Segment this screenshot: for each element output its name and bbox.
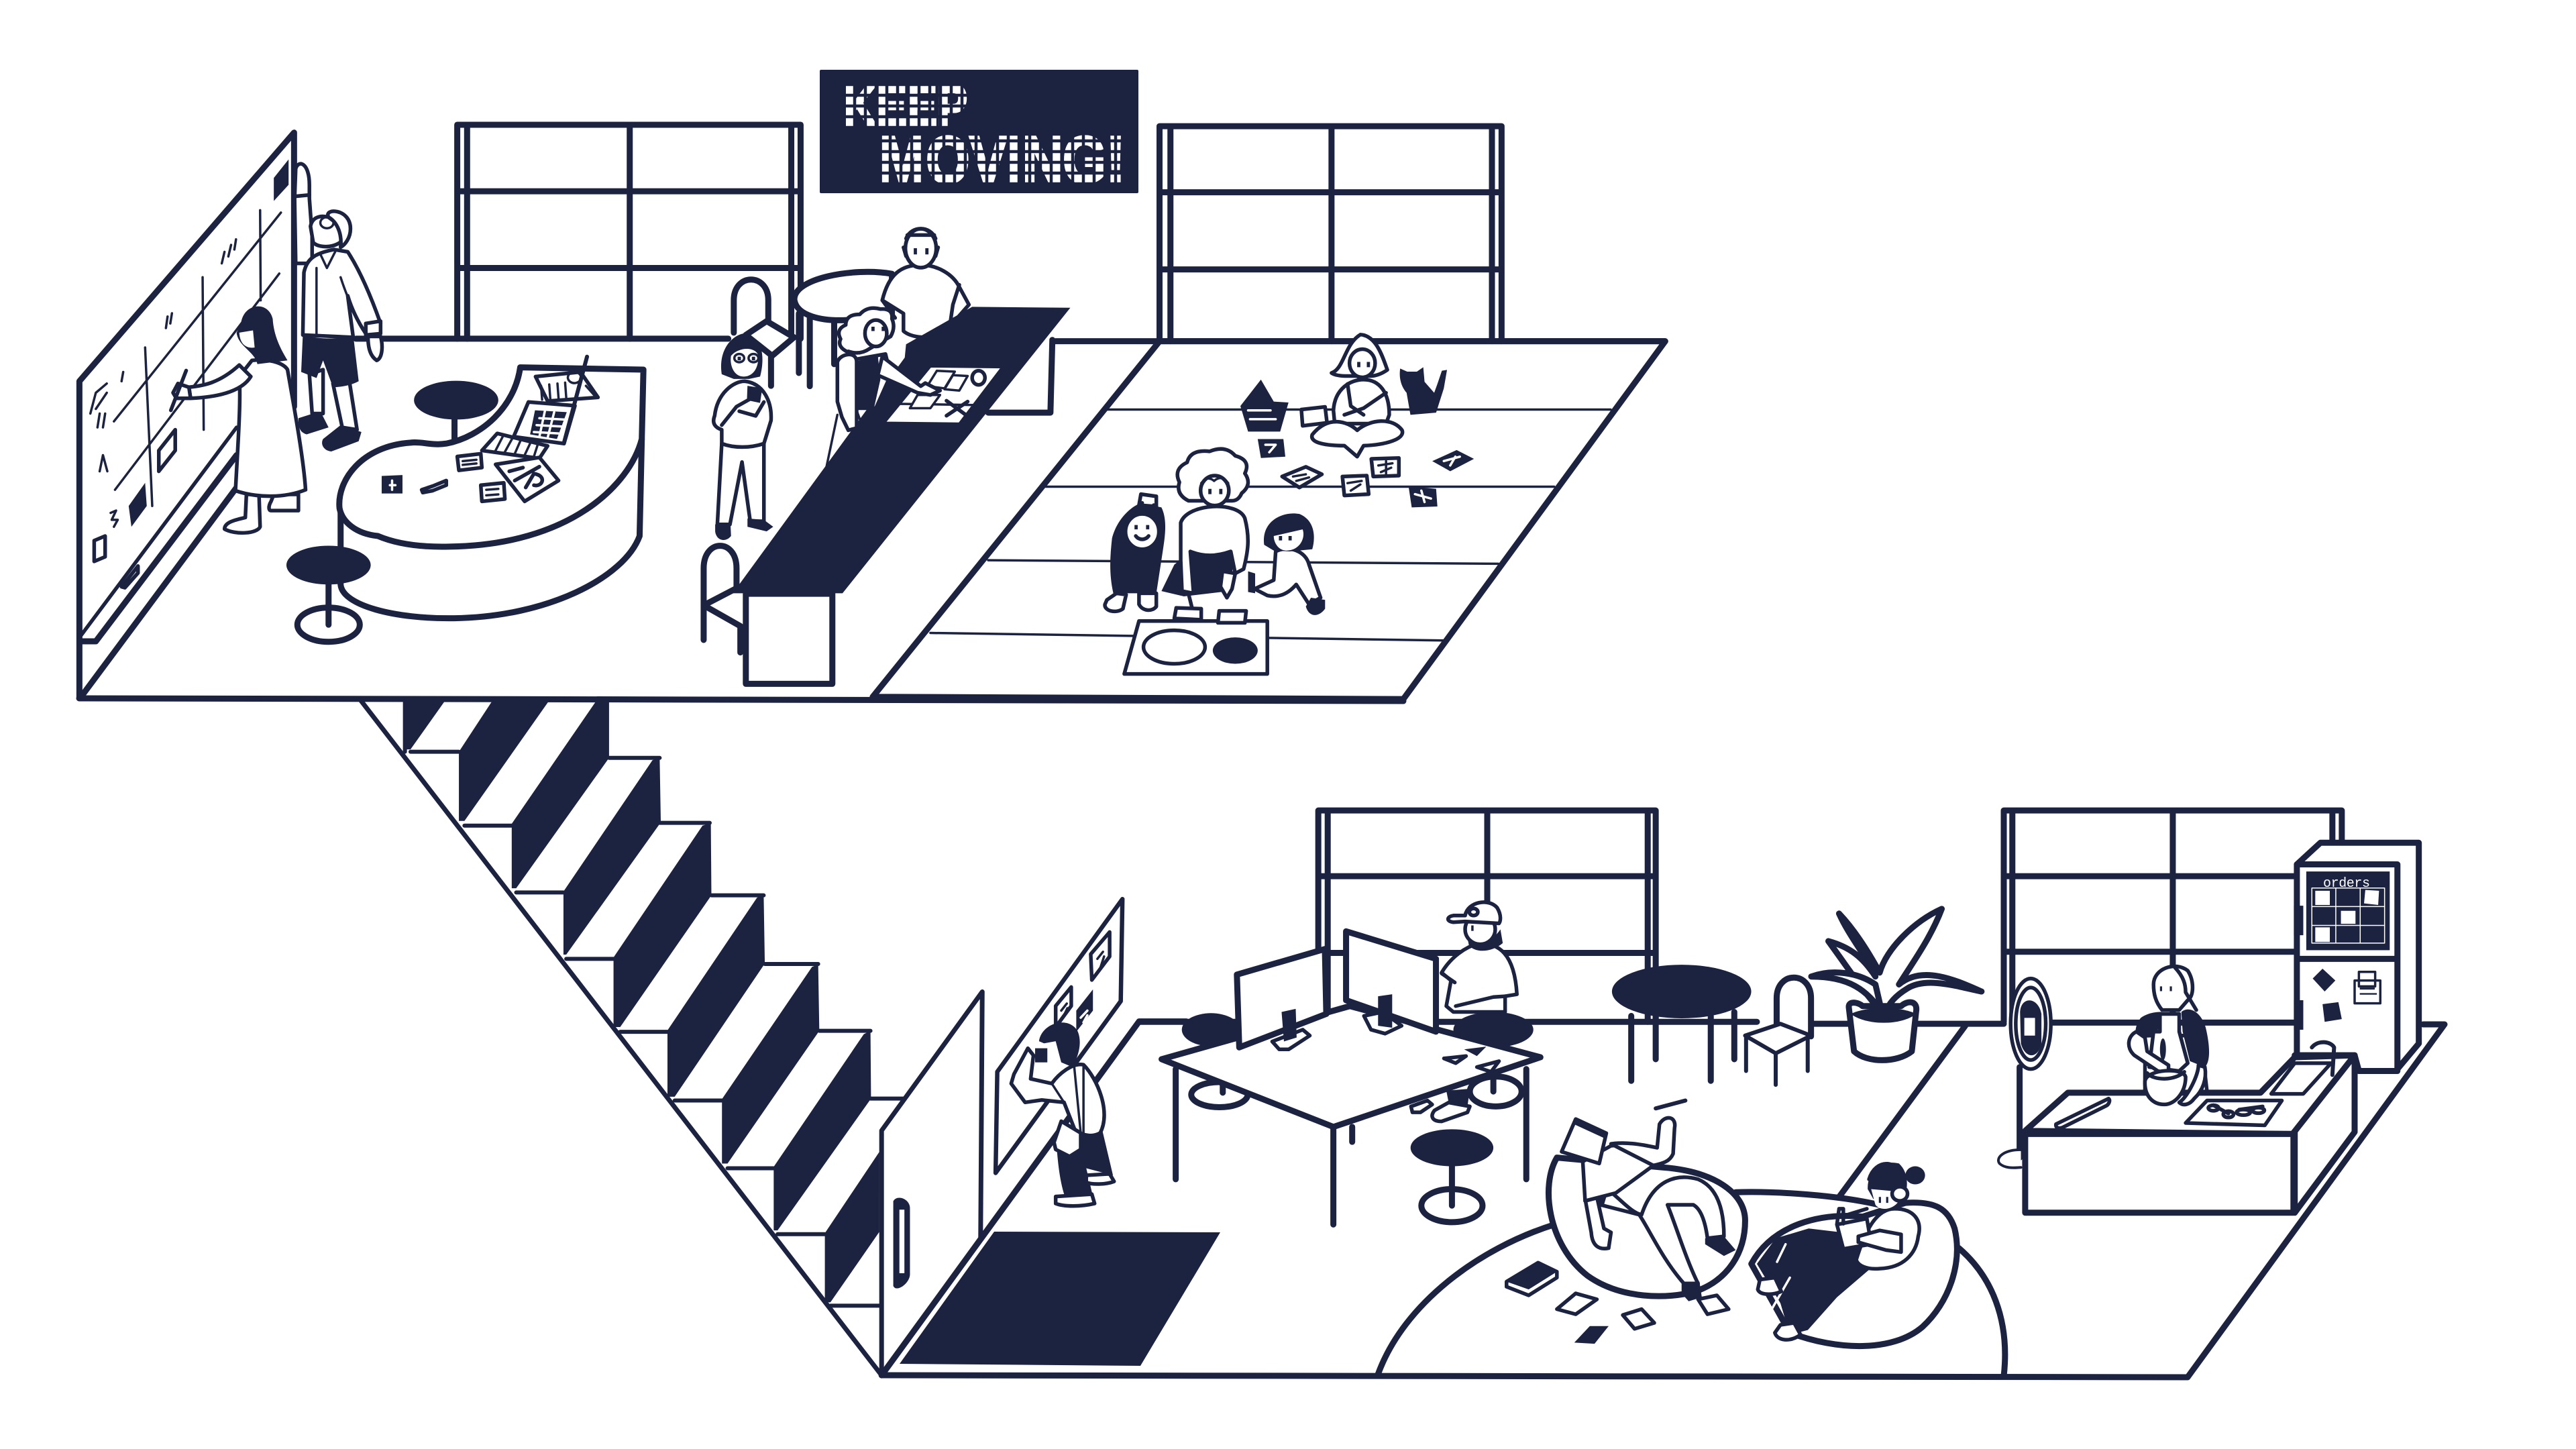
right area of upper floor <box>733 126 1665 699</box>
fridge <box>2294 843 2419 1071</box>
door wall <box>881 991 982 1375</box>
person: man behind counter <box>882 229 969 337</box>
rug and beanbag right <box>1752 1203 2005 1376</box>
plant <box>1811 909 1982 1060</box>
sign: keep moving: KEEP <box>844 72 967 139</box>
round table and chair <box>1612 965 1811 1085</box>
icon: black cat <box>1400 367 1447 415</box>
laptop on floor <box>1240 380 1327 431</box>
stair treads and risers <box>360 700 904 1375</box>
sign: keep moving: MOVING! <box>879 123 1125 197</box>
person: chef mixing <box>2129 966 2209 1105</box>
person: girl with phone <box>714 333 773 540</box>
person legs under desk <box>1411 1089 1470 1122</box>
window: lower right <box>2004 810 2342 1022</box>
work and lounge area <box>1140 810 1879 1374</box>
poster wall <box>996 899 1122 1173</box>
person: visitor with camera <box>1011 1022 1114 1206</box>
window: upper right <box>1159 126 1501 341</box>
person: woman with curly hair at counter <box>826 308 940 470</box>
floor back line <box>1811 1022 2295 1024</box>
panel: lower floor <box>882 810 2445 1377</box>
left area of upper floor <box>79 125 833 698</box>
game sheet on counter <box>884 366 1002 424</box>
items on curved table <box>382 357 598 501</box>
chair: front chair <box>704 546 741 653</box>
person: child holding paper <box>1105 494 1165 611</box>
person: man in cap at desk <box>1442 902 1517 1012</box>
round table behind counter <box>794 272 892 386</box>
kitchen area <box>1752 810 2419 1376</box>
navy door mat <box>900 1232 1220 1366</box>
order board <box>2306 871 2390 950</box>
person: woman with big hair <box>1161 449 1248 608</box>
floor back line <box>1056 338 1665 344</box>
window: upper left <box>458 125 800 339</box>
ring light mirror <box>1998 979 2051 1168</box>
person: man reaching up at whiteboard <box>294 164 382 451</box>
person: woman with headphones on beanbag <box>1757 1163 1925 1340</box>
chair: back chair <box>734 280 794 386</box>
curved table <box>339 368 643 619</box>
seats under desk <box>1182 1012 1534 1108</box>
lower floor outline <box>882 1024 2445 1377</box>
upper floor outline <box>79 698 1403 701</box>
lower floor left edge <box>881 1022 1187 1375</box>
rug edge <box>1378 1192 1879 1374</box>
counter base front <box>746 594 833 684</box>
rug items <box>1507 1263 1729 1344</box>
tatami divider line <box>1839 1026 1966 1197</box>
kitchen counter <box>2025 1042 2355 1213</box>
tatami mat area <box>873 341 1665 699</box>
floor back line <box>1140 1019 1757 1025</box>
dot matrix grid over sign text <box>832 74 1134 188</box>
whiteboard wall <box>79 133 729 698</box>
panel: staircase and door <box>360 700 1187 1375</box>
text: orders: orders <box>2323 876 2370 892</box>
stools at curved table <box>286 381 498 642</box>
long counter top <box>733 307 1071 593</box>
panel: upper floor <box>79 70 1665 701</box>
person: woman writing on whiteboard <box>171 307 305 533</box>
game board on floor <box>1124 608 1267 674</box>
person: woman sitting with laptop <box>1312 335 1403 457</box>
stool in front of desk <box>1411 1129 1493 1222</box>
window: lower middle <box>1318 810 1656 1022</box>
scattered cards on floor <box>1258 439 1474 507</box>
beanbag: reading person <box>1548 1101 1745 1301</box>
sign: keep moving <box>820 70 1138 197</box>
person: child with black bob <box>1248 513 1325 615</box>
desk with monitors <box>1162 931 1540 1224</box>
